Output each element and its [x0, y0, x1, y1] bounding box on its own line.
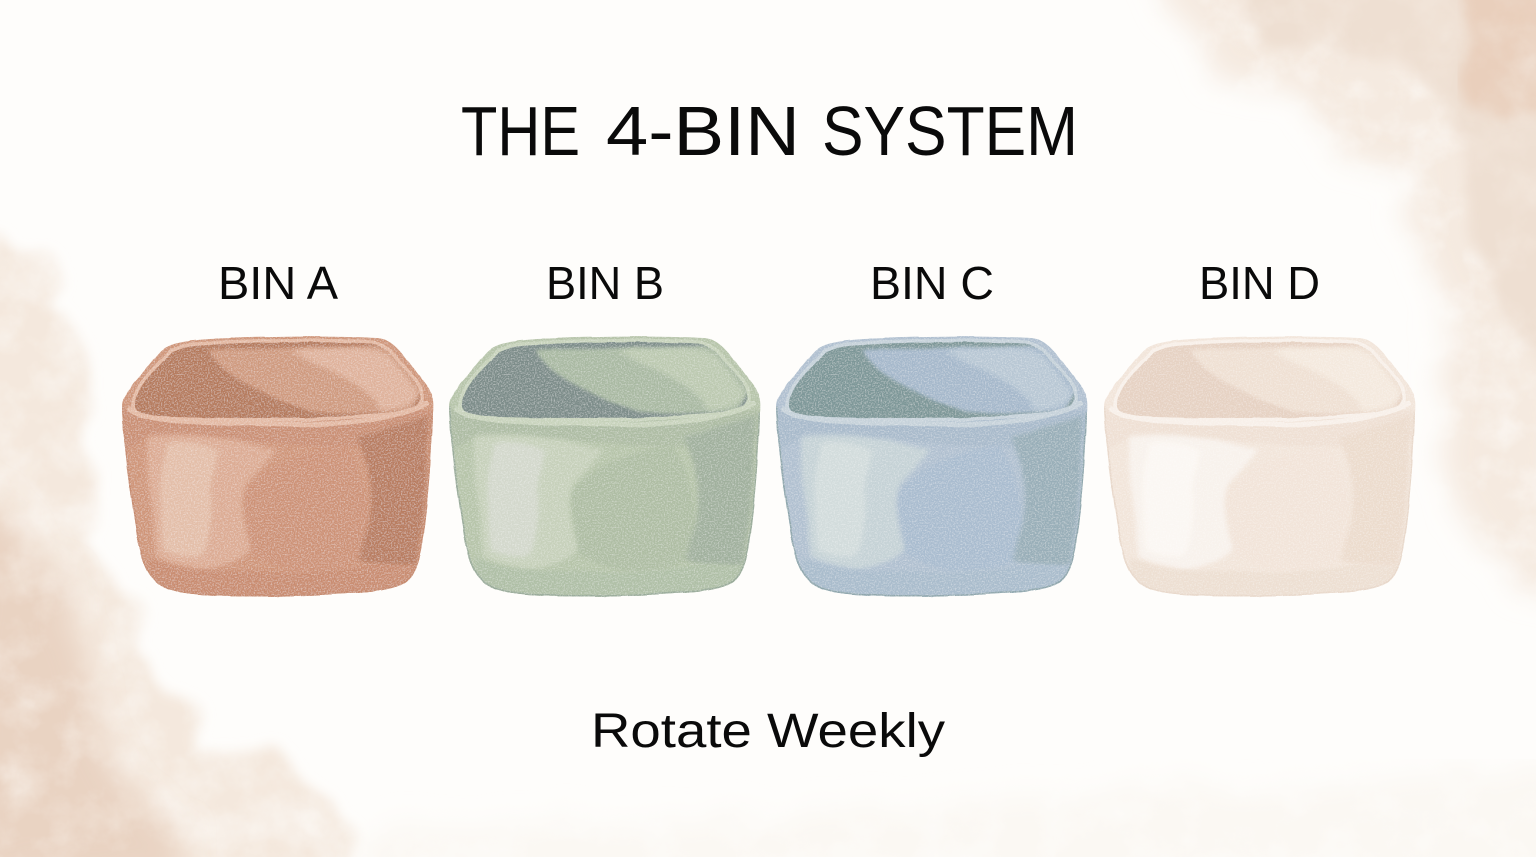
title: THE [461, 92, 580, 170]
title: SYSTEM [822, 92, 1078, 170]
watercolor wash: top right [1143, 0, 1536, 600]
icon: terracotta watercolor bin [120, 337, 436, 600]
caption: Rotate Weekly [591, 705, 945, 758]
icon: cream watercolor bin [1102, 337, 1418, 600]
panel: bin D [1102, 257, 1418, 600]
label: bin B: BIN B [546, 257, 664, 309]
watercolor wash: bottom left [0, 227, 357, 857]
label: bin C: BIN C [870, 257, 994, 309]
watercolor wash: faint bottom edge [360, 770, 1536, 857]
icon: dusty blue watercolor bin [774, 337, 1090, 600]
label: bin A: BIN A [218, 257, 338, 309]
title: 4-BIN [606, 92, 800, 170]
panel: bin B [447, 257, 763, 600]
panel: bin A [120, 257, 436, 600]
label: bin D: BIN D [1199, 257, 1320, 309]
panel: bin C [774, 257, 1090, 600]
icon: sage green watercolor bin [447, 337, 763, 600]
